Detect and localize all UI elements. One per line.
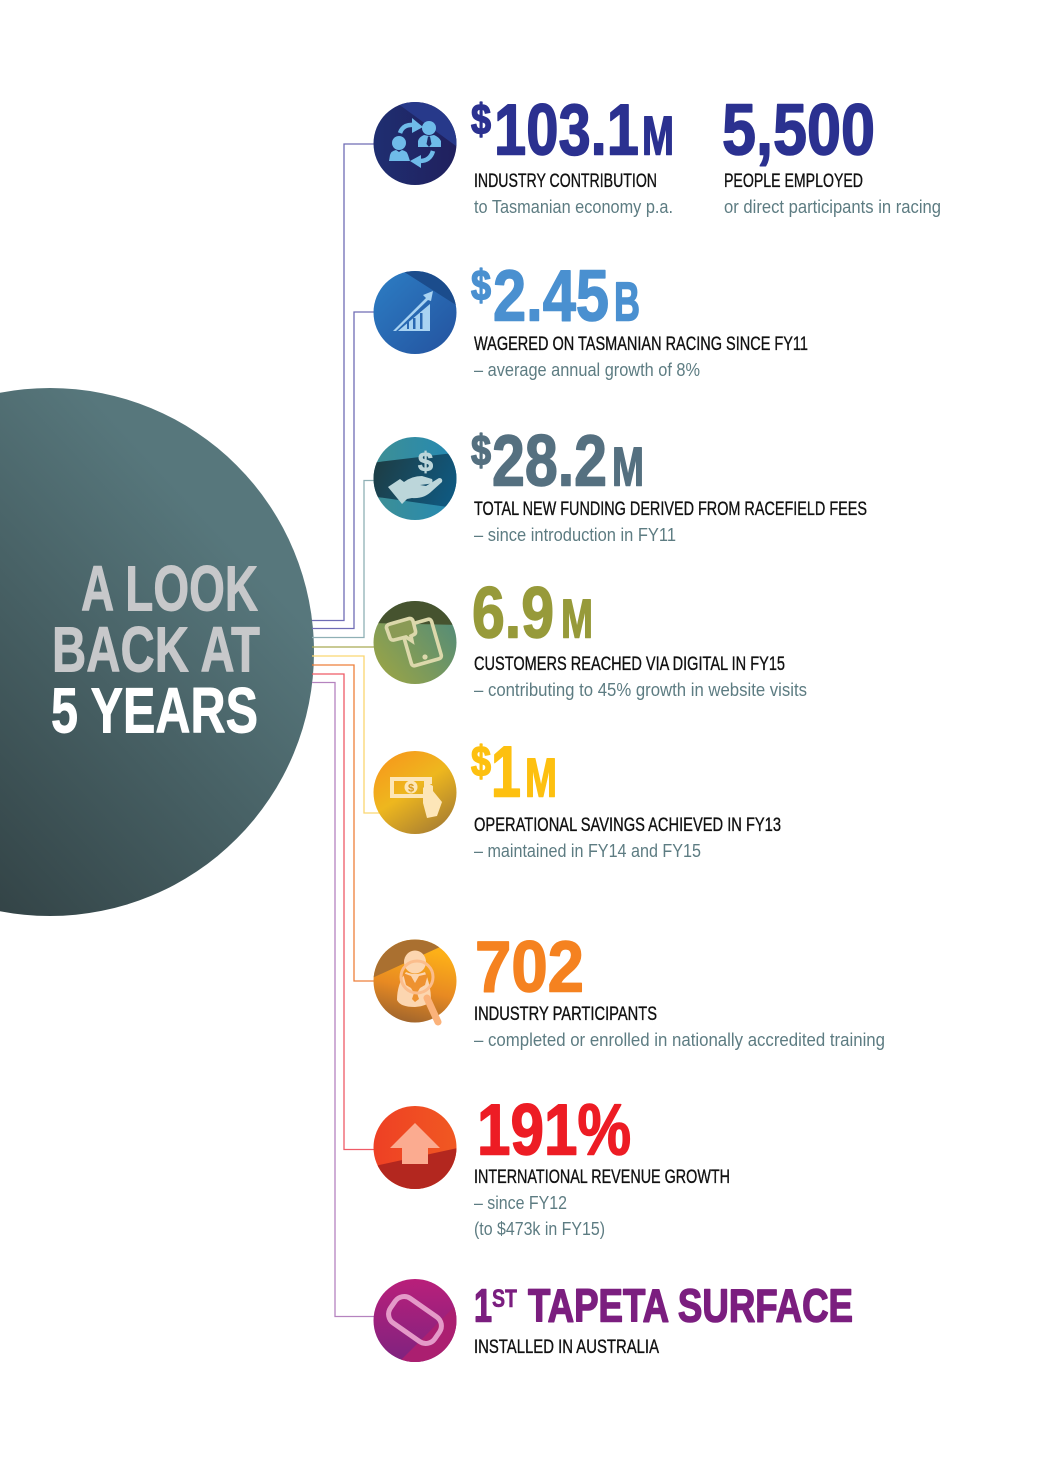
text: people employed: or direct participants in racing bbox=[724, 197, 941, 217]
text: industry participants: INDUSTRY PARTICIPANTS bbox=[474, 1004, 657, 1025]
title: A LOOK bbox=[81, 552, 258, 624]
text: industry contribution: to Tasmanian economy p.a. bbox=[474, 197, 673, 217]
title bbox=[51, 552, 260, 746]
text: industry contribution: INDUSTRY CONTRIBUTION bbox=[474, 171, 657, 192]
icon: banknote and hand bbox=[374, 751, 456, 834]
icon: tablet and speech bubble bbox=[374, 601, 456, 684]
text: customers reached: – contributing to 45% growth in website visits bbox=[474, 680, 807, 700]
text: international revenue: – since FY12 bbox=[474, 1193, 567, 1213]
stat: $1M bbox=[471, 732, 557, 812]
connector lines bbox=[312, 144, 392, 1316]
text: operational savings: – maintained in FY14 and FY15 bbox=[474, 841, 701, 861]
stat: $1M: $ bbox=[471, 738, 491, 786]
stat: $103.1M: $ bbox=[471, 96, 491, 144]
text: installed in Australia: INSTALLED IN AUSTRALIA bbox=[474, 1337, 659, 1358]
stat: 702: 702 bbox=[475, 928, 584, 1008]
stat: 5,500: 5,500 bbox=[722, 90, 875, 170]
text: industry participants bbox=[474, 1004, 885, 1050]
stat: 1st Tapeta Surface: ST bbox=[492, 1285, 517, 1313]
icon: hand with dollar: $ bbox=[418, 447, 433, 477]
icon: up arrow bbox=[374, 1106, 456, 1189]
icon: person under magnifier bbox=[374, 940, 456, 1026]
stat: $2.45B: 2.45 bbox=[493, 256, 609, 336]
text: operational savings: OPERATIONAL SAVINGS ACHIEVED IN FY13 bbox=[474, 815, 781, 836]
stat: $103.1M: M bbox=[642, 104, 674, 166]
text: racefield fees bbox=[474, 499, 867, 545]
stat: $28.2M: $ bbox=[471, 427, 491, 475]
stat: $1M: M bbox=[525, 746, 557, 808]
title: 5 YEARS bbox=[51, 674, 258, 746]
text: racefield fees: – since introduction in FY11 bbox=[474, 525, 676, 545]
stat: 191%: 191% bbox=[477, 1090, 631, 1170]
stat: $28.2M: M bbox=[612, 436, 644, 498]
stat: 1st Tapeta Surface: 1 bbox=[474, 1280, 492, 1332]
stat: $103.1M: 103.1 bbox=[494, 90, 639, 170]
stat: 6.9M: 6.9 bbox=[472, 574, 554, 654]
text: people employed bbox=[724, 171, 941, 217]
text: racefield fees: TOTAL NEW FUNDING DERIVED FROM RACEFIELD FEES bbox=[474, 499, 867, 520]
stat: $28.2M: 28.2 bbox=[492, 422, 607, 502]
text: people employed: PEOPLE EMPLOYED bbox=[724, 171, 863, 192]
text: wagered bbox=[474, 334, 808, 380]
text: industry contribution bbox=[474, 171, 673, 217]
text: wagered: – average annual growth of 8% bbox=[474, 360, 700, 380]
text: international revenue: (to $473k in FY15) bbox=[474, 1219, 605, 1239]
icon: growth chart bbox=[374, 271, 456, 354]
panel: central circle with title bbox=[0, 388, 314, 916]
stat: $1M: 1 bbox=[491, 732, 521, 812]
icon: banknote and hand: $ bbox=[408, 782, 414, 794]
icon: hand with dollar bbox=[374, 437, 456, 520]
text: international revenue: INTERNATIONAL REVENUE GROWTH bbox=[474, 1167, 730, 1188]
text: operational savings bbox=[474, 815, 781, 861]
text: international revenue bbox=[474, 1167, 730, 1239]
stat: 6.9M: M bbox=[561, 588, 593, 650]
icon: people exchange bbox=[374, 102, 456, 185]
stat: $2.45B: $ bbox=[471, 262, 491, 310]
text: customers reached: CUSTOMERS REACHED VIA DIGITAL IN FY15 bbox=[474, 654, 785, 675]
icon: tapeta surface bbox=[374, 1279, 456, 1362]
text: customers reached bbox=[474, 654, 807, 700]
text: wagered: WAGERED ON TASMANIAN RACING SINCE FY11 bbox=[474, 334, 808, 355]
stat: 1st Tapeta Surface: TAPETA SURFACE bbox=[528, 1280, 853, 1332]
stat: $2.45B: B bbox=[614, 270, 640, 332]
title: BACK AT bbox=[52, 614, 260, 686]
text: industry participants: – completed or enrolled in nationally accredited training bbox=[474, 1030, 885, 1050]
